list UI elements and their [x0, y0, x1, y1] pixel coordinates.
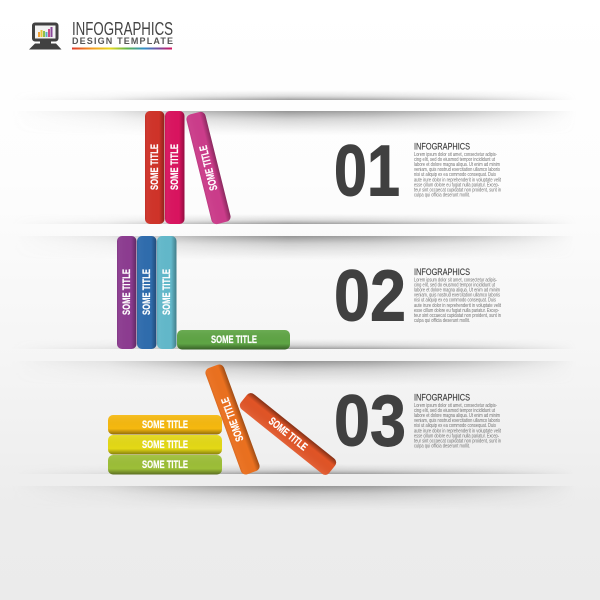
icon: computer monitor	[29, 24, 62, 50]
book: orange leaning: SOME TITLE	[219, 396, 246, 443]
book: red-orange tilted: SOME TITLE	[266, 415, 309, 453]
book: orange leaning	[204, 363, 261, 476]
shelf shadows	[54, 92, 558, 506]
book: yellow stacked: SOME TITLE	[142, 439, 188, 451]
text block 1: esse cillum dolore eu fugiat nulla pariatur. Excep-	[414, 182, 499, 188]
text block 3: cing elit, sed do eiusmod tempor incididunt ut	[414, 408, 495, 414]
book: red-orange tilted	[238, 391, 338, 477]
text block 3: veniam, quis nostrud exercitation ullamco laboris	[414, 418, 500, 424]
number 01: 01	[334, 132, 400, 212]
book: magenta leaning: SOME TITLE	[198, 144, 220, 192]
panel: shelf 1 books	[145, 111, 232, 225]
book: lime stacked: SOME TITLE	[142, 459, 188, 471]
panel: shelf 2 books	[117, 236, 290, 350]
book: teal: SOME TITLE	[161, 269, 173, 315]
text block 2: esse cillum dolore eu fugiat nulla pariatur. Excep-	[414, 308, 499, 314]
text block 1: Lorem ipsum dolor sit amet, consectetur adipis-	[414, 152, 497, 158]
number 02: 02	[334, 256, 406, 336]
subtitle: design template: DESIGN TEMPLATE	[72, 36, 173, 46]
text block 1: culpa qui officia deserunt mollit.	[414, 192, 470, 198]
book: lime stacked	[108, 455, 222, 474]
book: red: SOME TITLE	[149, 144, 161, 190]
text block 3: esse cillum dolore eu fugiat nulla pariatur. Excep-	[414, 433, 499, 439]
text block 1: aute irure dolor in reprehenderit in voluptate velit	[414, 177, 501, 183]
book: amber stacked: SOME TITLE	[142, 419, 188, 431]
text block 3: labore et dolore magna aliqua. Ut enim ad minim	[414, 413, 500, 419]
text block 3: Lorem ipsum dolor sit amet, consectetur adipis-	[414, 403, 497, 409]
text block 3: aute irure dolor in reprehenderit in voluptate velit	[414, 428, 501, 434]
text block 3: culpa qui officia deserunt mollit.	[414, 444, 470, 450]
number 03: 03	[334, 382, 406, 462]
text block 3	[414, 392, 501, 450]
book: yellow stacked	[108, 435, 222, 454]
text block 2: nisi ut aliquip ex ea commodo consequat. Duis	[414, 298, 496, 304]
text block 2: teur sint occaecat cupidatat non proident, sunt in	[414, 313, 501, 319]
text block 2: culpa qui officia deserunt mollit.	[414, 318, 470, 324]
text block 2: aute irure dolor in reprehenderit in voluptate velit	[414, 303, 501, 309]
title: infographics: INFOGRAPHICS	[72, 19, 173, 39]
text block 3: nisi ut aliquip ex ea commodo consequat. Duis	[414, 423, 496, 429]
text block 2: veniam, quis nostrud exercitation ullamco laboris	[414, 293, 500, 299]
text block 1	[414, 142, 501, 198]
book: blue: SOME TITLE	[141, 269, 153, 315]
text block 1: teur sint occaecat cupidatat non proident, sunt in	[414, 187, 501, 193]
text block 1: INFOGRAPHICS	[414, 142, 470, 152]
text block 1: cing elit, sed do eiusmod tempor incididunt ut	[414, 157, 495, 163]
rainbow underline	[72, 48, 172, 50]
book: purple: SOME TITLE	[121, 269, 133, 315]
book: green lying flat: SOME TITLE	[211, 334, 257, 346]
text block 1: veniam, quis nostrud exercitation ullamco laboris	[414, 167, 500, 173]
text block 2	[414, 267, 501, 324]
text block 1: nisi ut aliquip ex ea commodo consequat. Duis	[414, 172, 496, 178]
text block 1: labore et dolore magna aliqua. Ut enim ad minim	[414, 162, 500, 168]
text block 3: INFOGRAPHICS	[414, 392, 470, 404]
header logo	[29, 19, 173, 50]
book: amber stacked	[108, 415, 222, 434]
book: crimson: SOME TITLE	[169, 144, 181, 190]
text block 2: INFOGRAPHICS	[414, 267, 470, 278]
book: purple	[117, 236, 136, 349]
text block 2: labore et dolore magna aliqua. Ut enim ad minim	[414, 288, 500, 294]
text block 2: cing elit, sed do eiusmod tempor incididunt ut	[414, 282, 495, 288]
panel: shelf 3 books	[108, 363, 338, 477]
book: green lying flat	[177, 330, 290, 350]
book: teal	[157, 236, 176, 349]
text block 3: teur sint occaecat cupidatat non proident, sunt in	[414, 438, 501, 444]
book: blue	[137, 236, 156, 349]
text block 2: Lorem ipsum dolor sit amet, consectetur adipis-	[414, 278, 497, 284]
